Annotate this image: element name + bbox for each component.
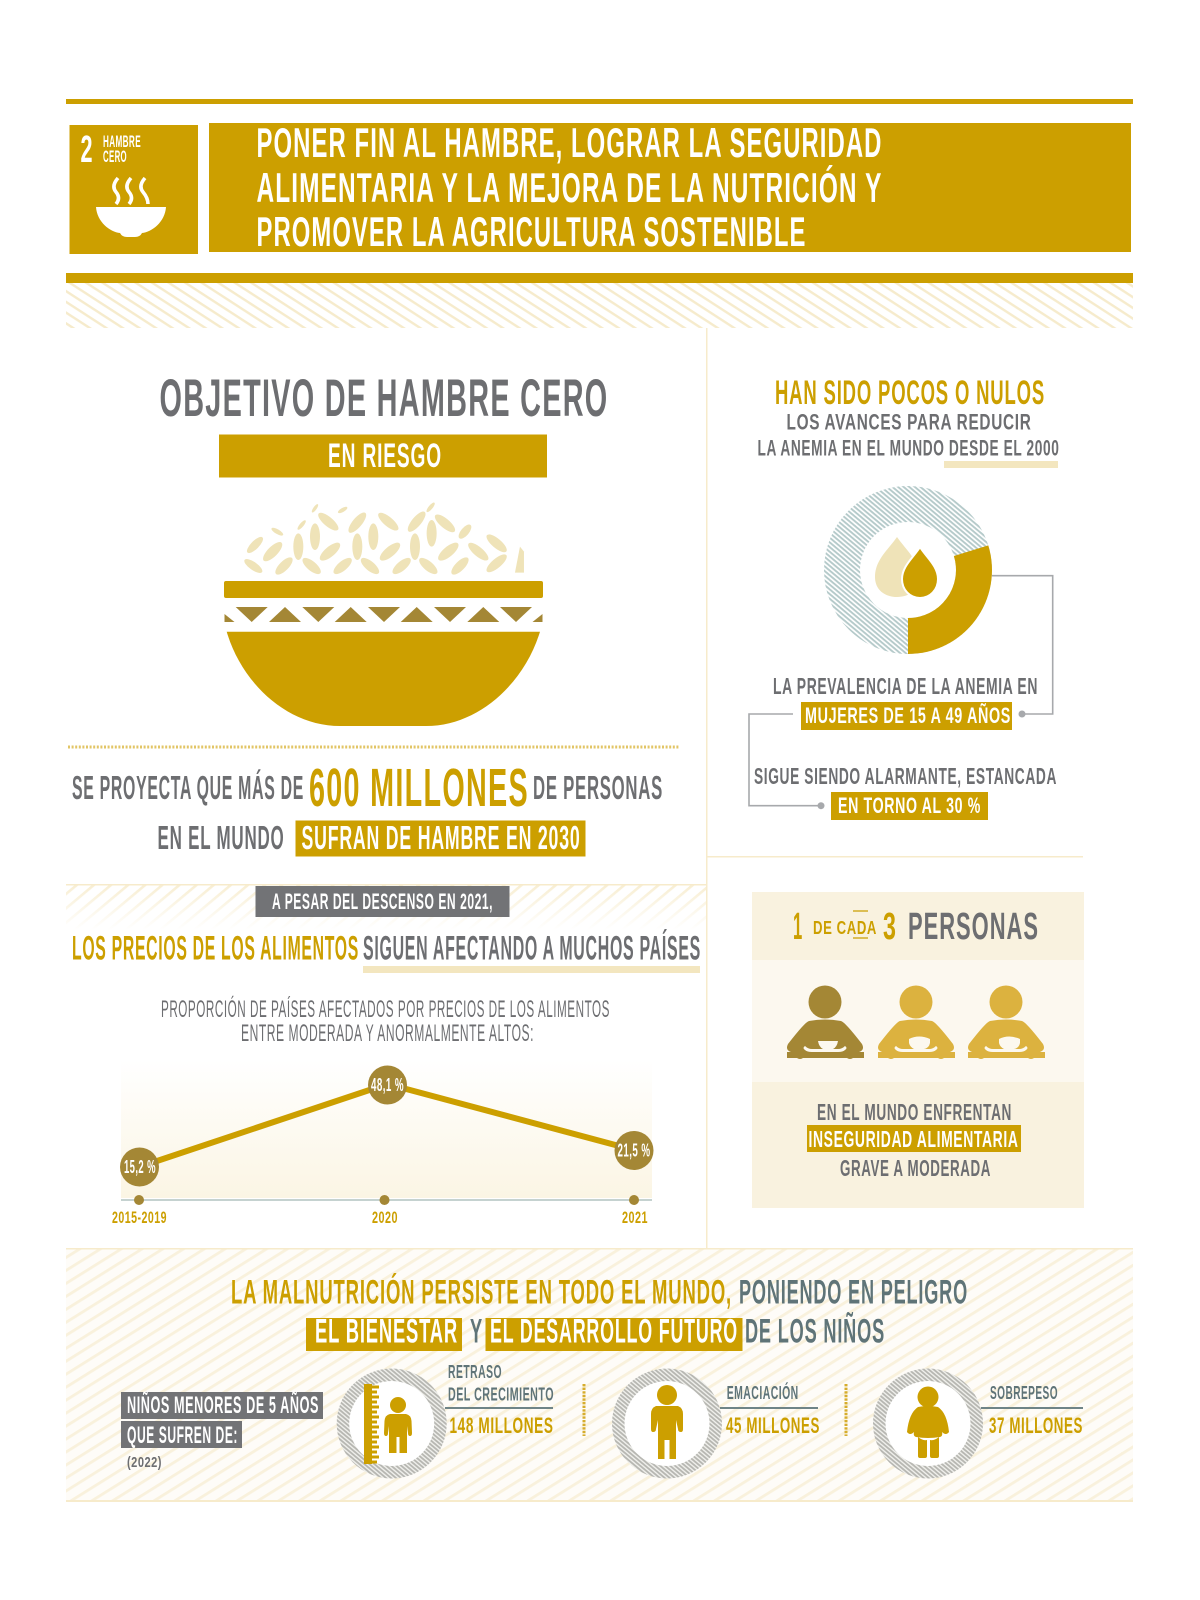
lower header rule <box>66 273 1133 283</box>
data point 15,2 % <box>120 1148 159 1186</box>
en riesgo label <box>219 434 547 478</box>
malnutrition heading: LA MALNUTRICIÓN PERSISTE EN TODO EL MUNDO, <box>231 1274 732 1312</box>
anemia heading: LOS AVANCES PARA REDUCIR <box>786 410 1032 434</box>
malnutrition heading: DE LOS NIÑOS <box>745 1312 885 1350</box>
food prices section heading: LOS PRECIOS DE LOS ALIMENTOS <box>72 930 359 968</box>
panel: malnutrition <box>66 1248 1133 1502</box>
top rule <box>66 99 1133 104</box>
food prices section heading <box>66 884 706 973</box>
panel heading <box>793 906 1039 948</box>
malnutrition heading <box>231 1274 968 1351</box>
projection statement: SUFRAN DE HAMBRE EN 2030 <box>302 819 580 856</box>
donut chart with drops <box>842 504 992 654</box>
anemia statement: EN TORNO AL 30 % <box>838 793 981 818</box>
children under five label: (2022) <box>127 1454 162 1471</box>
SDG 2 icon tile: 2 <box>80 129 94 171</box>
header banner <box>209 119 1131 255</box>
projection statement: 600 MILLONES <box>309 758 529 818</box>
SDG 2 icon tile: HAMBRE <box>103 132 141 151</box>
stat: wasting <box>720 1382 820 1438</box>
stat: wasting: 45 MILLONES <box>726 1413 820 1438</box>
data point 21,5 % <box>614 1131 654 1170</box>
icon: person eating light 2 <box>968 986 1045 1059</box>
x axis labels: 2021 <box>622 1208 648 1227</box>
icon: person eating dark <box>787 986 864 1059</box>
icon: overweight child <box>880 1375 976 1472</box>
panel heading: 1 <box>793 906 803 948</box>
connector: donut to women label <box>992 576 1053 718</box>
anemia statement <box>754 673 1057 820</box>
anemia statement: LA PREVALENCIA DE LA ANEMIA EN <box>773 673 1038 699</box>
projection statement <box>72 758 663 856</box>
malnutrition heading: Y <box>470 1312 483 1350</box>
stat: overweight: SOBREPESO <box>990 1383 1058 1403</box>
stat: overweight <box>981 1383 1083 1438</box>
data point 21,5 %: 21,5 % <box>618 1140 650 1160</box>
chart subtitle: ENTRE MODERADA Y ANORMALMENTE ALTOS: <box>241 1020 534 1047</box>
panel text: GRAVE A MODERADA <box>840 1155 991 1181</box>
panel text: INSEGURIDAD ALIMENTARIA <box>808 1126 1018 1152</box>
panel text: EN EL MUNDO ENFRENTAN <box>817 1099 1012 1125</box>
anemia statement: MUJERES DE 15 A 49 AÑOS <box>805 703 1011 728</box>
x axis labels: 2015-2019 <box>112 1208 167 1227</box>
panel text <box>807 1099 1021 1181</box>
malnutrition heading: PONIENDO EN PELIGRO <box>739 1274 968 1312</box>
stat: stunting: RETRASO <box>448 1362 502 1382</box>
data point 48,1 %: 48,1 % <box>371 1075 404 1095</box>
right column divider <box>707 856 1083 858</box>
data point 15,2 %: 15,2 % <box>124 1157 156 1177</box>
text: PROPORCIÓN DE PAÍSES AFECTADOS POR PRECIOS DE LOS ALIMENTOS <box>161 996 610 1023</box>
stat: stunting: DEL CRECIMIENTO <box>448 1384 554 1404</box>
children under five label: QUE SUFREN DE: <box>127 1422 238 1449</box>
icon: child with height ruler <box>343 1375 440 1472</box>
malnutrition heading: EL BIENESTAR <box>315 1312 458 1350</box>
icon: light drop <box>875 537 919 597</box>
rice grains <box>242 501 524 577</box>
stat: stunting: 148 MILLONES <box>450 1413 554 1438</box>
en riesgo label: EN RIESGO <box>328 437 442 475</box>
malnutrition heading: EL DESARROLLO FUTURO <box>490 1312 738 1350</box>
SDG 2 icon tile <box>70 125 198 254</box>
data point 48,1 % <box>368 1066 407 1104</box>
panel heading: DE CADA <box>813 918 877 938</box>
text: SIGUEN AFECTANDO A MUCHOS PAÍSES <box>363 930 701 968</box>
panel heading: 3 <box>883 906 897 948</box>
stat: overweight: 37 MILLONES <box>989 1413 1083 1438</box>
projection statement: DE PERSONAS <box>533 769 663 806</box>
bowl pattern <box>224 607 542 622</box>
striped band under header <box>66 283 1133 328</box>
connector: women label to 30 percent <box>749 714 824 809</box>
panel heading: PERSONAS <box>908 906 1039 948</box>
dotted divider <box>68 746 680 748</box>
header banner: PROMOVER LA AGRICULTURA SOSTENIBLE <box>256 208 806 255</box>
title: objetivo de hambre cero: OBJETIVO DE HAMBRE CERO <box>160 369 608 428</box>
icon: wasted child <box>618 1375 716 1472</box>
stat: stunting <box>445 1362 554 1438</box>
x axis labels <box>112 1208 648 1227</box>
stat: wasting: EMACIACIÓN <box>727 1382 799 1403</box>
bowl body <box>227 632 540 726</box>
line chart <box>112 1060 654 1227</box>
panel: one in three people <box>752 892 1084 1208</box>
anemia heading <box>758 374 1060 468</box>
food prices section heading: A PESAR DEL DESCENSO EN 2021, <box>272 889 493 914</box>
children under five label <box>121 1391 323 1471</box>
children under five label: NIÑOS MENORES DE 5 AÑOS <box>127 1391 319 1419</box>
x axis labels: 2020 <box>372 1208 398 1227</box>
chart subtitle <box>161 996 610 1047</box>
bowl rim <box>224 581 543 598</box>
projection statement: EN EL MUNDO <box>158 819 284 856</box>
projection statement: SE PROYECTA QUE MÁS DE <box>72 769 304 806</box>
SDG 2 icon tile: CERO <box>103 147 127 166</box>
icon: gold drop <box>902 547 938 598</box>
column divider <box>706 328 708 1248</box>
icon: rice bowl <box>224 501 543 726</box>
icon: person eating light 1 <box>878 986 955 1059</box>
